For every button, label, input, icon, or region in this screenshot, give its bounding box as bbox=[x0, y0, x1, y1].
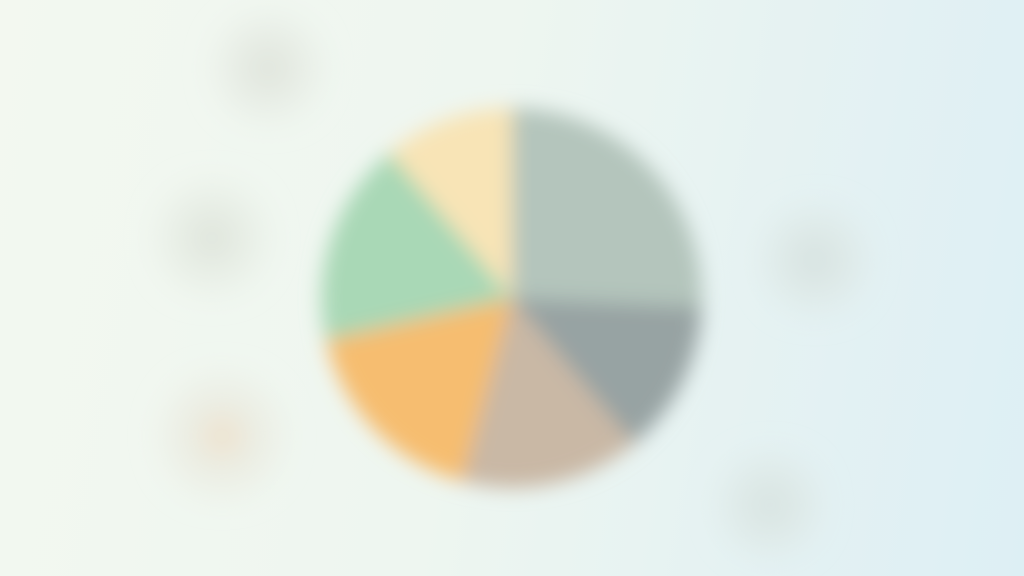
icon: bottom-right bubble bbox=[722, 457, 818, 553]
slice: gray-green bbox=[512, 108, 702, 307]
icon: left bubble bbox=[160, 186, 264, 290]
pie chart bbox=[321, 108, 702, 488]
icon: right bubble bbox=[765, 210, 865, 310]
slice: tan bbox=[462, 298, 634, 488]
slice: orange bbox=[326, 298, 512, 481]
slice: green bbox=[321, 152, 512, 340]
icon: top-left bubble bbox=[218, 18, 318, 118]
icon: bottom-left bubble bbox=[164, 378, 280, 494]
slice: dark gray bbox=[512, 298, 702, 444]
slice: cream bbox=[390, 108, 512, 298]
